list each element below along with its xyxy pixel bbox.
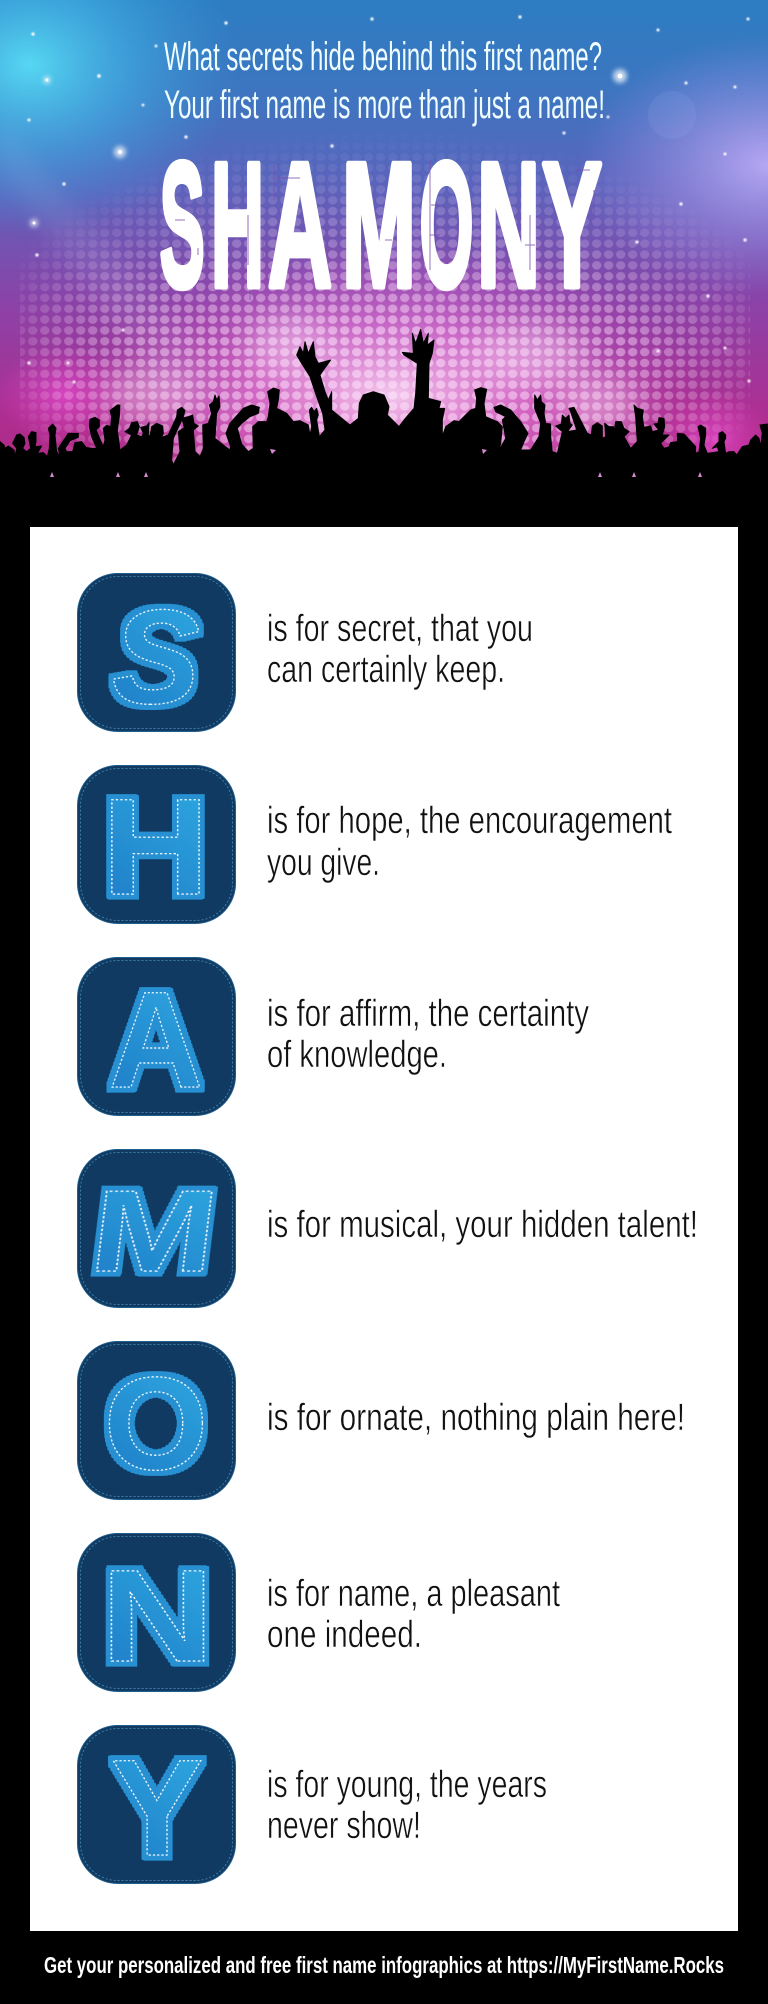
title: SHAMONY: A (268, 126, 332, 324)
text: S meaning (267, 608, 533, 691)
text: A meaning: of knowledge. (267, 1034, 447, 1076)
row O (78, 1342, 685, 1500)
row A (78, 958, 589, 1117)
icon: letter H: H (102, 771, 209, 924)
icon: letter O (78, 1342, 236, 1500)
text: A meaning: is for affirm, the certainty (267, 993, 589, 1035)
text: N meaning: is for name, a pleasant (267, 1573, 560, 1615)
icon: letter N: N (101, 1542, 214, 1689)
icon: letter H (78, 766, 236, 924)
text: A meaning (267, 993, 589, 1076)
row N (78, 1534, 560, 1692)
title: SHAMONY: M (342, 126, 416, 324)
title: SHAMONY: Y (542, 126, 602, 324)
text: H meaning (267, 800, 672, 884)
text: Y meaning (267, 1764, 547, 1847)
concert background (0, 0, 768, 464)
icon: letter M: M (84, 1166, 225, 1296)
black lower band and side frame (0, 477, 768, 527)
icon: letter N (78, 1534, 236, 1692)
title: SHAMONY: H (211, 126, 264, 324)
icon: letter Y (78, 1726, 236, 1885)
icon: letter M (78, 1150, 236, 1308)
title: SHAMONY: N (477, 126, 540, 324)
row H (78, 766, 672, 924)
text: N meaning: one indeed. (267, 1614, 422, 1656)
icon: letter S: S (112, 583, 200, 732)
title: SHAMONY: O (420, 126, 474, 324)
heading: intro lines (164, 35, 605, 127)
text: S meaning: is for secret, that you (267, 608, 533, 650)
icon: letter O: O (104, 1350, 208, 1497)
text: N meaning (267, 1573, 560, 1656)
icon: letter S (78, 574, 236, 732)
icon: letter Y: Y (111, 1732, 203, 1885)
title: SHAMONY (160, 126, 602, 324)
row S (78, 574, 533, 732)
panel: white letters panel (30, 527, 738, 1931)
title: SHAMONY: S (160, 126, 205, 324)
icon: letter A (78, 958, 236, 1117)
text: Y meaning: is for young, the years (267, 1764, 547, 1806)
text: S meaning: can certainly keep. (267, 649, 505, 691)
row Y (78, 1726, 547, 1885)
text: H meaning: you give. (267, 842, 380, 884)
icon: letter A: A (109, 964, 203, 1117)
row M (78, 1150, 698, 1308)
text: Y meaning: never show! (267, 1805, 421, 1847)
crowd silhouette (0, 329, 768, 500)
